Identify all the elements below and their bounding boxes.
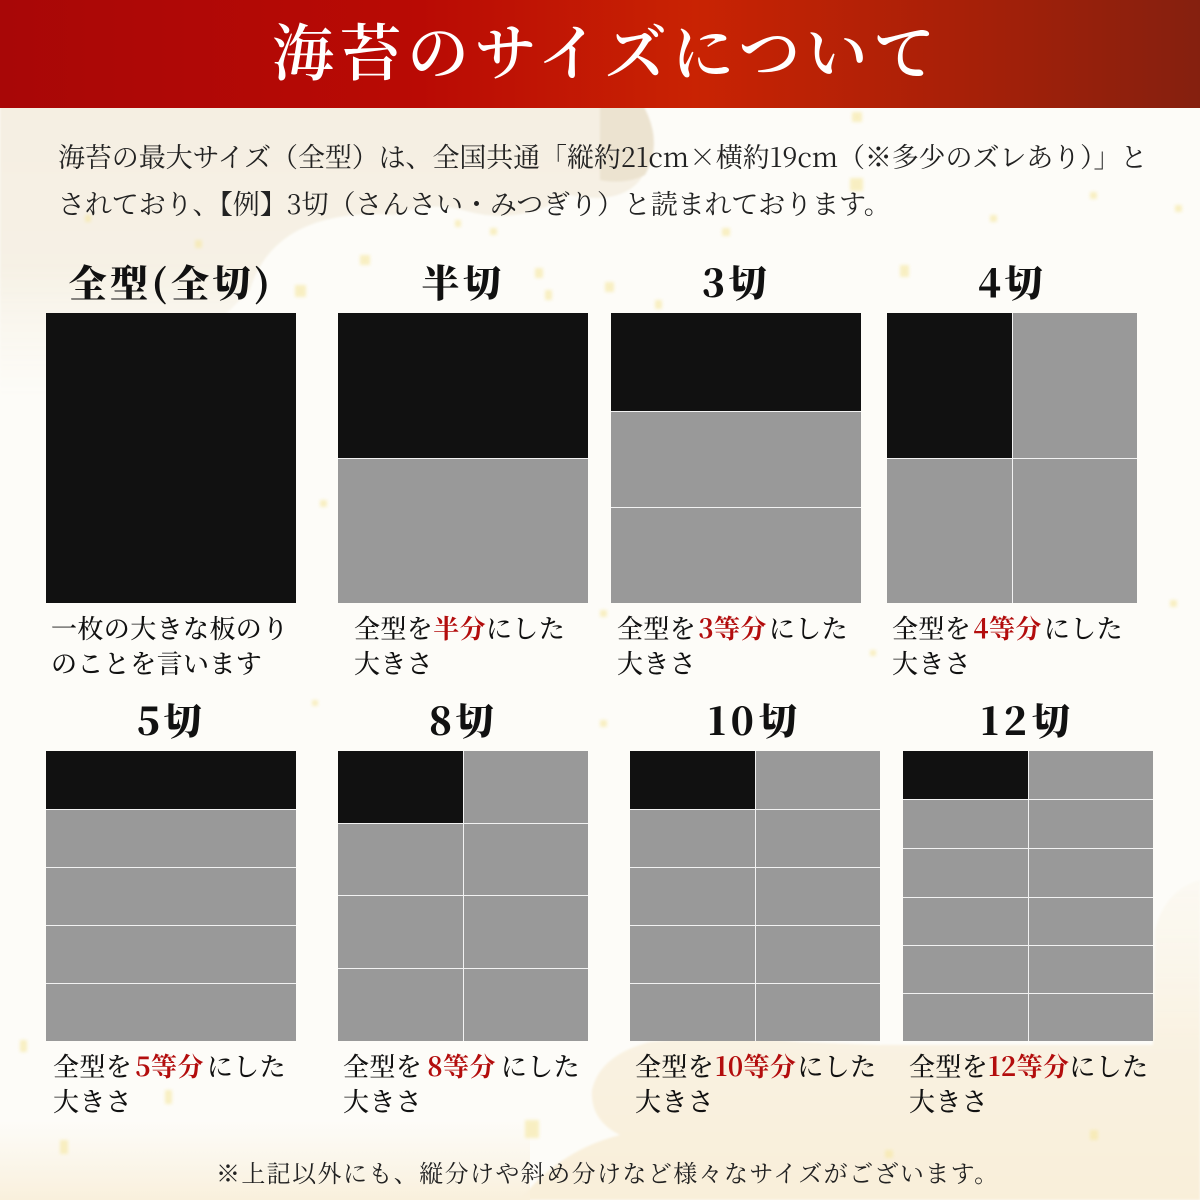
- heading: 4切: 4切: [978, 253, 1046, 308]
- intro text: [58, 136, 1147, 222]
- heading: 12切: 12切: [981, 691, 1075, 746]
- caption: 3切: [617, 609, 848, 681]
- caption: 半切: 全型を半分にした: [354, 609, 565, 646]
- caption: 全型: 一枚の大きな板のり: [51, 609, 289, 646]
- intro text: 海苔の最大サイズ（全型）は、全国共通「縦約21cm×横約19cm（※多少のズレあり）」と: [58, 136, 1147, 175]
- caption: 全型: [51, 609, 289, 681]
- caption: 半切: 大きさ: [354, 644, 433, 681]
- heading: 8切: 8切: [429, 691, 497, 746]
- diagram: 4切: [887, 313, 1137, 603]
- footnote: ※上記以外にも、縦分けや斜め分けなど様々なサイズがございます。: [216, 1154, 1000, 1189]
- title: 海苔のサイズについて: [272, 4, 941, 93]
- caption: 10切: [635, 1047, 877, 1119]
- caption: 10切: 全型を10等分にした: [635, 1047, 877, 1084]
- caption: 12切: 全型を12等分にした: [909, 1047, 1149, 1084]
- caption: 3切: 全型を3等分にした: [617, 609, 848, 646]
- diagram: 12切: [903, 751, 1153, 1041]
- caption: 5切: 大きさ: [53, 1082, 132, 1119]
- caption: 8切: [343, 1047, 580, 1119]
- caption: 10切: 大きさ: [635, 1082, 714, 1119]
- diagram: 3切: [611, 313, 861, 603]
- intro text: されており、【例】3切（さんさい・みつぎり）と読まれております。: [58, 183, 891, 222]
- diagram: 全型: [46, 313, 296, 603]
- diagram: 5切: [46, 751, 296, 1041]
- caption: 12切: [909, 1047, 1149, 1119]
- diagram: 8切: [338, 751, 588, 1041]
- caption: 4切: [892, 609, 1123, 681]
- diagram: 半切: [338, 313, 588, 603]
- caption: 半切: [354, 609, 565, 681]
- heading: 10切: 10切: [708, 691, 802, 746]
- caption: 5切: 全型を5等分にした: [53, 1047, 286, 1084]
- caption: 4切: 大きさ: [892, 644, 971, 681]
- heading: 全型: 全型(全切): [69, 253, 273, 308]
- caption: 全型: のことを言います: [51, 644, 262, 681]
- caption: 5切: [53, 1047, 286, 1119]
- heading: 半切: 半切: [421, 253, 504, 308]
- title banner: [0, 0, 1200, 108]
- caption: 8切: 全型を8等分にした: [343, 1047, 580, 1084]
- diagram: 10切: [630, 751, 880, 1041]
- heading: 5切: 5切: [137, 691, 205, 746]
- caption: 3切: 大きさ: [617, 644, 696, 681]
- caption: 4切: 全型を4等分にした: [892, 609, 1123, 646]
- caption: 12切: 大きさ: [909, 1082, 988, 1119]
- caption: 8切: 大きさ: [343, 1082, 422, 1119]
- heading: 3切: 3切: [702, 253, 770, 308]
